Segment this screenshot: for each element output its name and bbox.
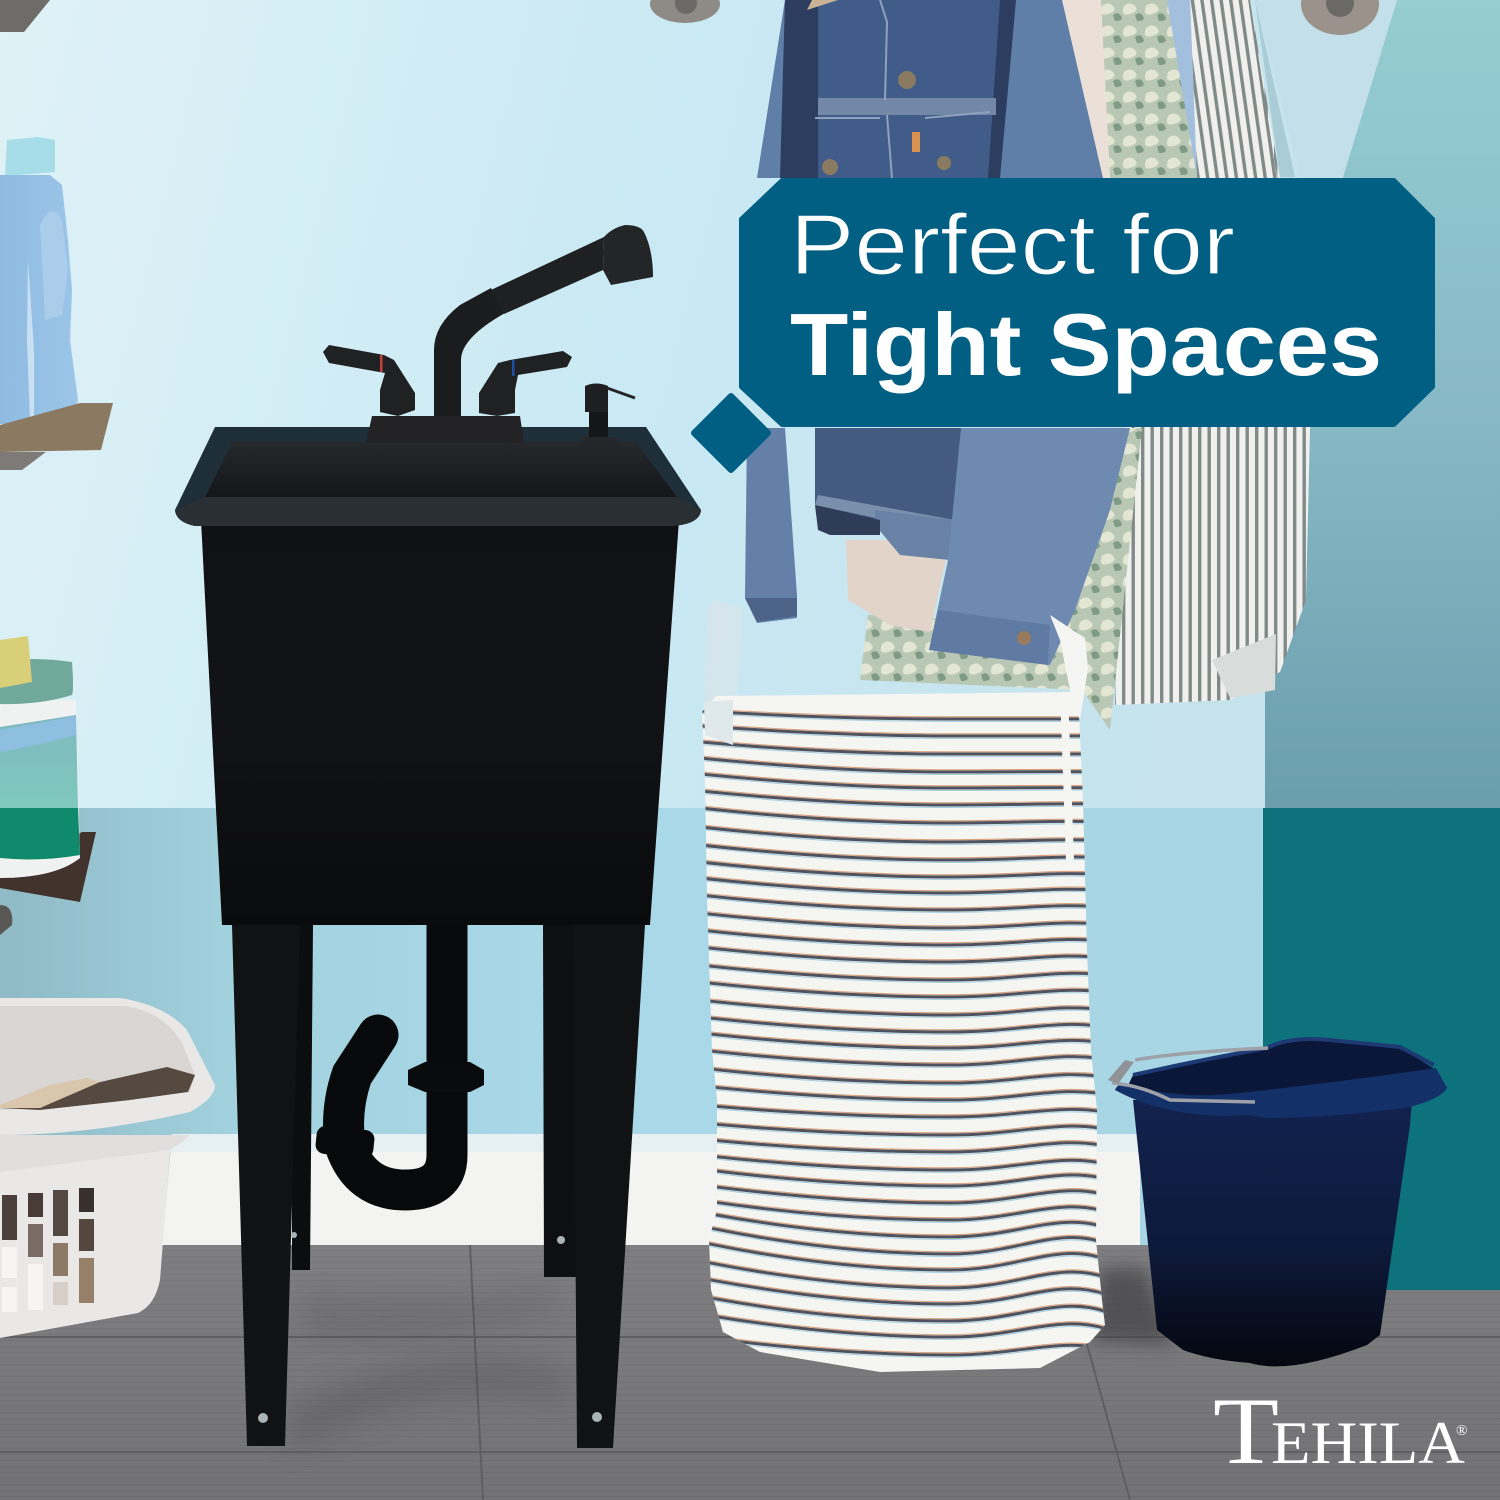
bottle body [0, 175, 78, 424]
cold handle [479, 351, 572, 416]
basket interior [0, 1006, 195, 1110]
left strap [705, 600, 743, 745]
rear legs [292, 925, 313, 1270]
front legs [232, 925, 300, 1446]
hanging clothes [745, 0, 1310, 730]
wood shelf [0, 832, 96, 902]
bucket rim front [1115, 1068, 1447, 1118]
bottle highlight [27, 260, 34, 420]
label green [0, 808, 80, 859]
floral shirt lower [860, 428, 1142, 730]
spray head [603, 225, 653, 285]
basket rim [0, 998, 215, 1135]
laundry bag with stripes [700, 600, 1110, 1380]
rim front band [175, 497, 701, 526]
shelf bracket [0, 452, 46, 470]
bucket handle [1112, 1048, 1268, 1102]
brand logo: ® [1456, 1423, 1467, 1439]
handle grip [1108, 1060, 1134, 1084]
soap dispenser [580, 384, 635, 443]
pull-out wand [491, 237, 604, 314]
bottle cap [5, 137, 55, 176]
faucet base [366, 416, 524, 443]
canister lid [0, 659, 73, 704]
basket band [0, 1135, 190, 1172]
faucet [323, 225, 653, 443]
callout line one: Perfect for [790, 198, 1235, 293]
hot handle [323, 345, 415, 416]
left strap lower [704, 700, 733, 745]
canister body [0, 700, 80, 878]
tile floor [0, 1245, 1500, 1500]
callout [694, 180, 1433, 470]
bottle handle hole [40, 211, 68, 320]
tub body [201, 520, 679, 925]
basin opening [205, 442, 677, 497]
blue marker [512, 360, 514, 376]
bag body [700, 690, 1110, 1380]
wall pipe flanges [0, 0, 1379, 35]
brand logo: EHILA [1271, 1410, 1465, 1476]
trap collar [315, 1125, 375, 1159]
bucket rim back [1125, 1040, 1447, 1108]
basket body [0, 1140, 188, 1338]
laundry basket [0, 998, 215, 1338]
baseboard [162, 1134, 1140, 1246]
shelf bracket [0, 905, 12, 935]
bucket [1108, 1039, 1447, 1366]
label sky [0, 716, 76, 752]
brand logo: T [1213, 1378, 1279, 1484]
leg bolts [258, 1232, 602, 1423]
towels [0, 1067, 195, 1110]
beige shirt tail [846, 540, 950, 632]
floral shirt [1100, 0, 1197, 178]
basket holes [2, 1188, 94, 1312]
denim jacket lower [745, 428, 1130, 665]
brand logo [1213, 1378, 1467, 1484]
striped shirt [1115, 0, 1310, 705]
drain pipe [344, 900, 447, 1190]
pipe collar [408, 1062, 484, 1092]
bucket rim top edge [1133, 1039, 1434, 1075]
red marker [380, 355, 382, 372]
bucket body [1133, 1100, 1412, 1366]
tub rim [175, 427, 701, 526]
denim jacket upper [757, 0, 1103, 178]
black utility sink [175, 225, 701, 1448]
faucet spout [434, 288, 505, 416]
tan towel [0, 1078, 100, 1108]
beige shirt [1062, 0, 1110, 178]
wipes canister on shelf [0, 636, 96, 935]
sponge pack [0, 636, 32, 688]
callout bubble [741, 180, 1433, 425]
callout pointer diamond [694, 396, 768, 470]
teal panel at right [1255, 0, 1500, 1290]
callout line two: Tight Spaces [790, 295, 1382, 394]
striped shirt cuff [1212, 634, 1276, 698]
detergent bottle on shelf [0, 137, 113, 470]
blue shirt [1165, 0, 1197, 178]
striped shirt upper folds [1190, 0, 1277, 178]
wood shelf [0, 403, 113, 452]
right strap [1050, 615, 1088, 720]
canister label [0, 715, 78, 808]
